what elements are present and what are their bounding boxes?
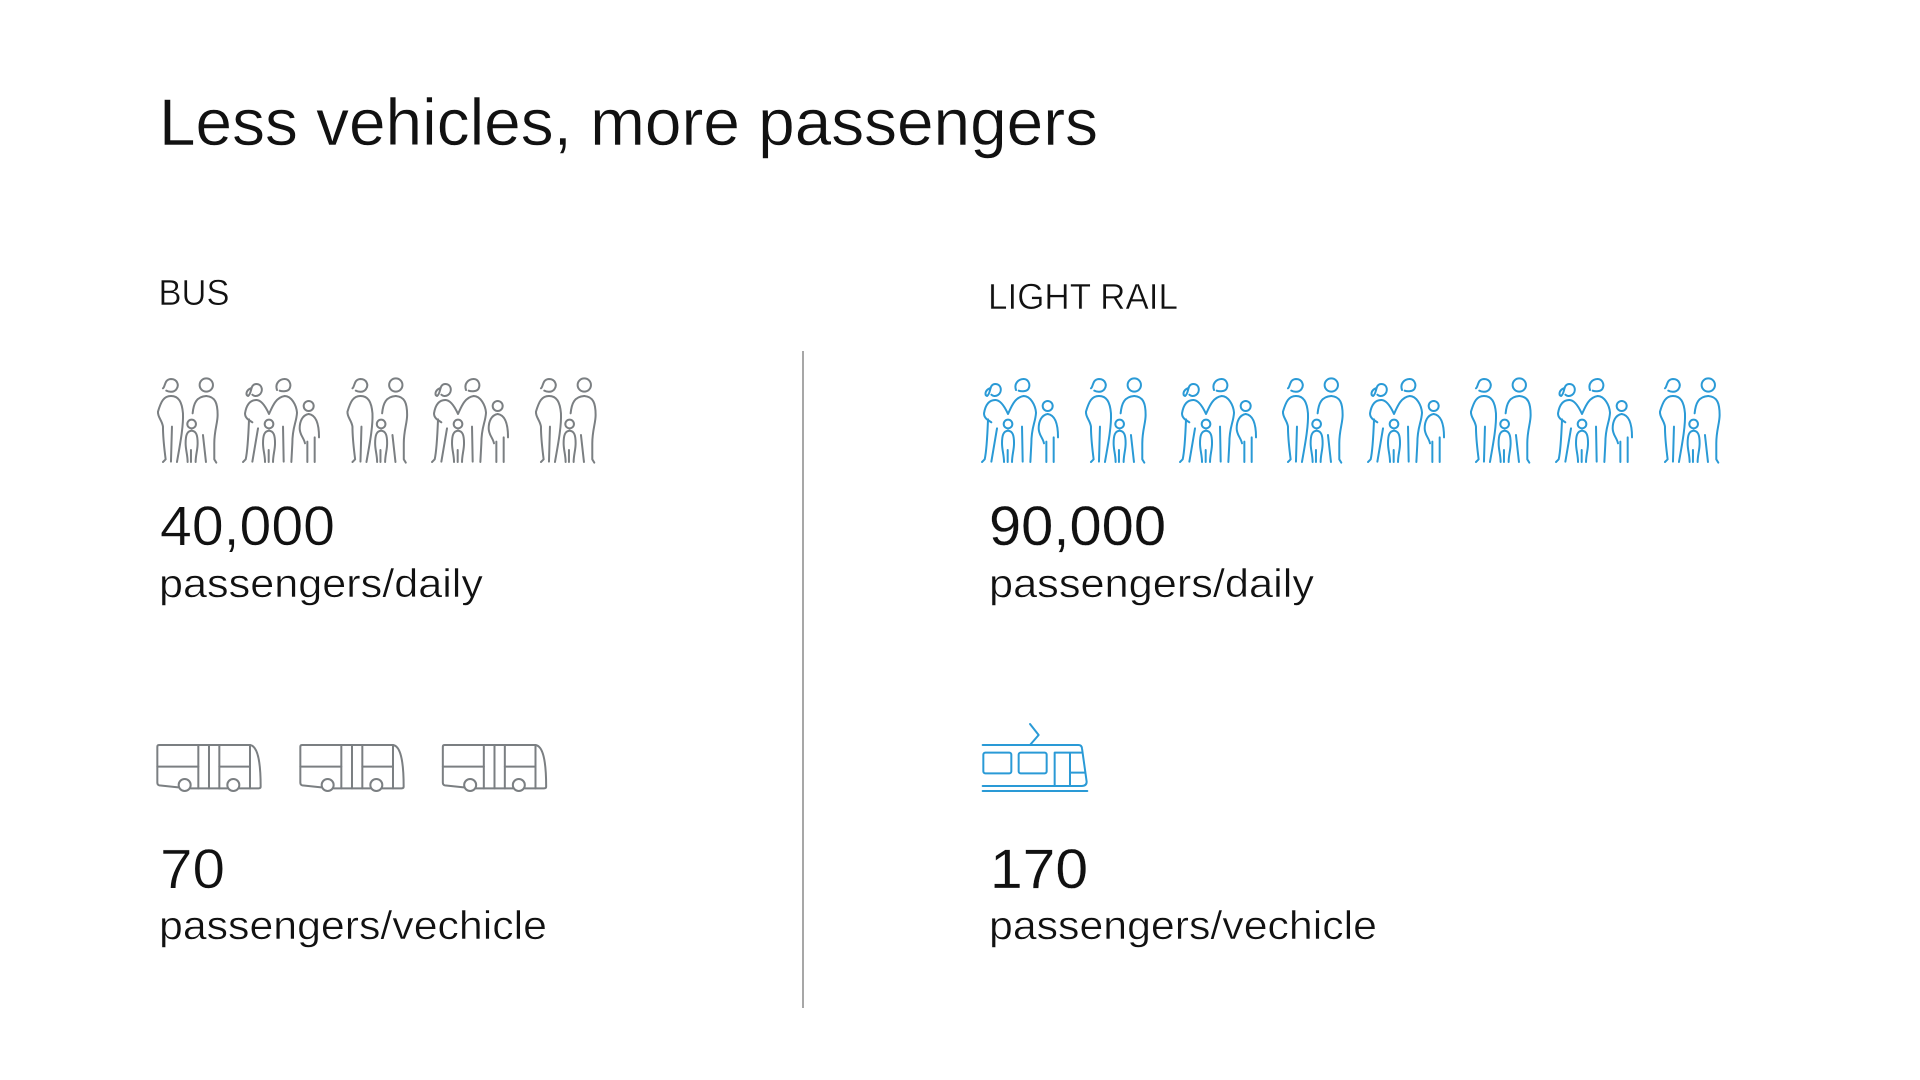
stat: 40,000: 40,000 <box>160 494 335 557</box>
stat: 90,000: 90,000 <box>989 494 1166 557</box>
icon: three buses <box>157 745 546 791</box>
panel: bus <box>157 272 596 948</box>
label: passengers per day: passengers/daily <box>989 562 1314 606</box>
stat: 170: 170 <box>990 837 1088 900</box>
panel: light rail <box>982 276 1720 948</box>
stat: 70: 70 <box>160 837 225 900</box>
label: passengers per vehicle: passengers/vechicle <box>159 904 547 948</box>
icon: light rail passenger families <box>982 378 1720 463</box>
label: passengers per day: passengers/daily <box>159 562 483 606</box>
title: Less vehicles, more passengers <box>159 85 1098 159</box>
icon: tram <box>983 724 1087 791</box>
heading: light rail: LIGHT RAIL <box>988 276 1178 317</box>
divider <box>802 351 804 1008</box>
label: passengers per vehicle: passengers/vechicle <box>989 904 1377 948</box>
heading: bus: BUS <box>158 272 230 313</box>
icon: bus passenger families <box>158 378 596 463</box>
